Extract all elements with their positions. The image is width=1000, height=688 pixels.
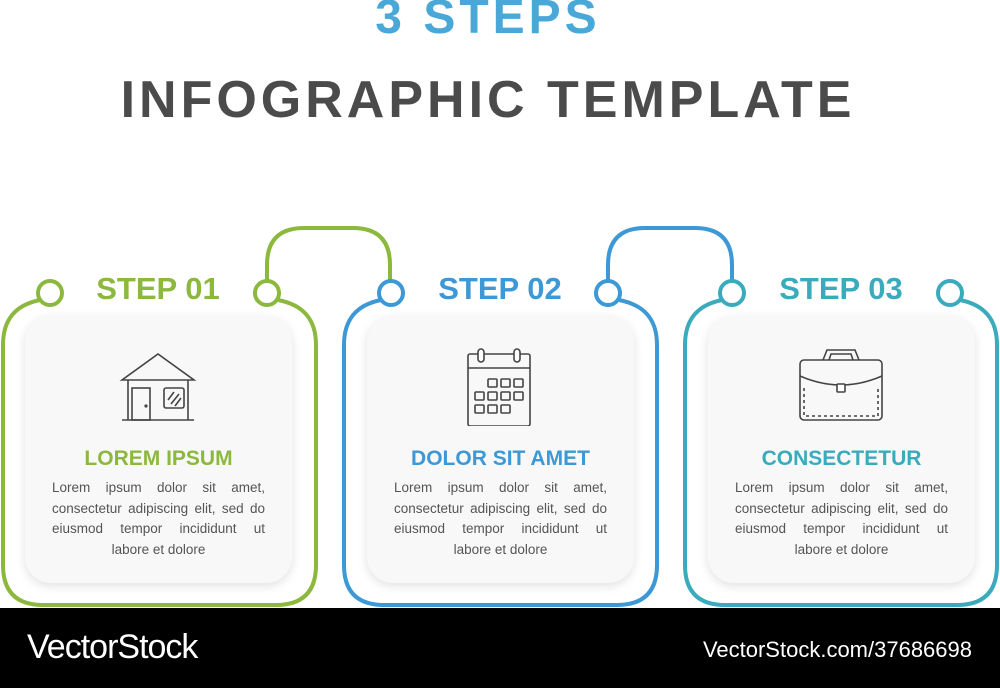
text block: Lorem ipsum dolor sit amet,	[735, 480, 948, 495]
step label 03: STEP 03	[779, 271, 903, 306]
step label 01: STEP 01	[96, 271, 220, 306]
text block: consectetur adipiscing elit, sed do	[735, 500, 948, 516]
text block: consectetur adipiscing elit, sed do	[394, 500, 607, 516]
panel: step 1 card	[25, 316, 292, 583]
text block: eiusmod tempor incididunt ut	[735, 521, 948, 536]
icon: calendar	[467, 348, 531, 426]
text block: Lorem ipsum dolor sit amet,	[394, 480, 607, 495]
panel: step 2 card	[367, 316, 634, 583]
heading: CONSECTETUR	[762, 447, 921, 470]
icon: briefcase	[799, 349, 883, 421]
title: infographic template: INFOGRAPHIC TEMPLATE	[121, 71, 855, 129]
text block: eiusmod tempor incididunt ut	[52, 521, 265, 536]
text block: labore et dolore	[454, 542, 547, 556]
outline: step 3	[685, 281, 997, 605]
heading: LOREM IPSUM	[84, 447, 233, 470]
outline: step 1	[3, 228, 390, 605]
text block: consectetur adipiscing elit, sed do	[52, 500, 265, 516]
text block: labore et dolore	[795, 542, 888, 556]
heading: DOLOR SIT AMET	[411, 447, 590, 470]
footer logo: VectorStock	[27, 628, 197, 666]
icon: house	[120, 353, 196, 421]
text block: Lorem ipsum dolor sit amet,	[52, 480, 265, 495]
text block	[52, 480, 265, 556]
outline: step 2	[344, 228, 732, 605]
step label 02: STEP 02	[438, 271, 562, 306]
footer url: VectorStock.com/37686698	[703, 637, 972, 662]
text block: labore et dolore	[112, 542, 205, 556]
footer bar	[0, 608, 1000, 688]
text block: eiusmod tempor incididunt ut	[394, 521, 607, 536]
text block	[735, 480, 948, 556]
panel: step 3 card	[708, 316, 975, 583]
text block	[394, 480, 607, 556]
